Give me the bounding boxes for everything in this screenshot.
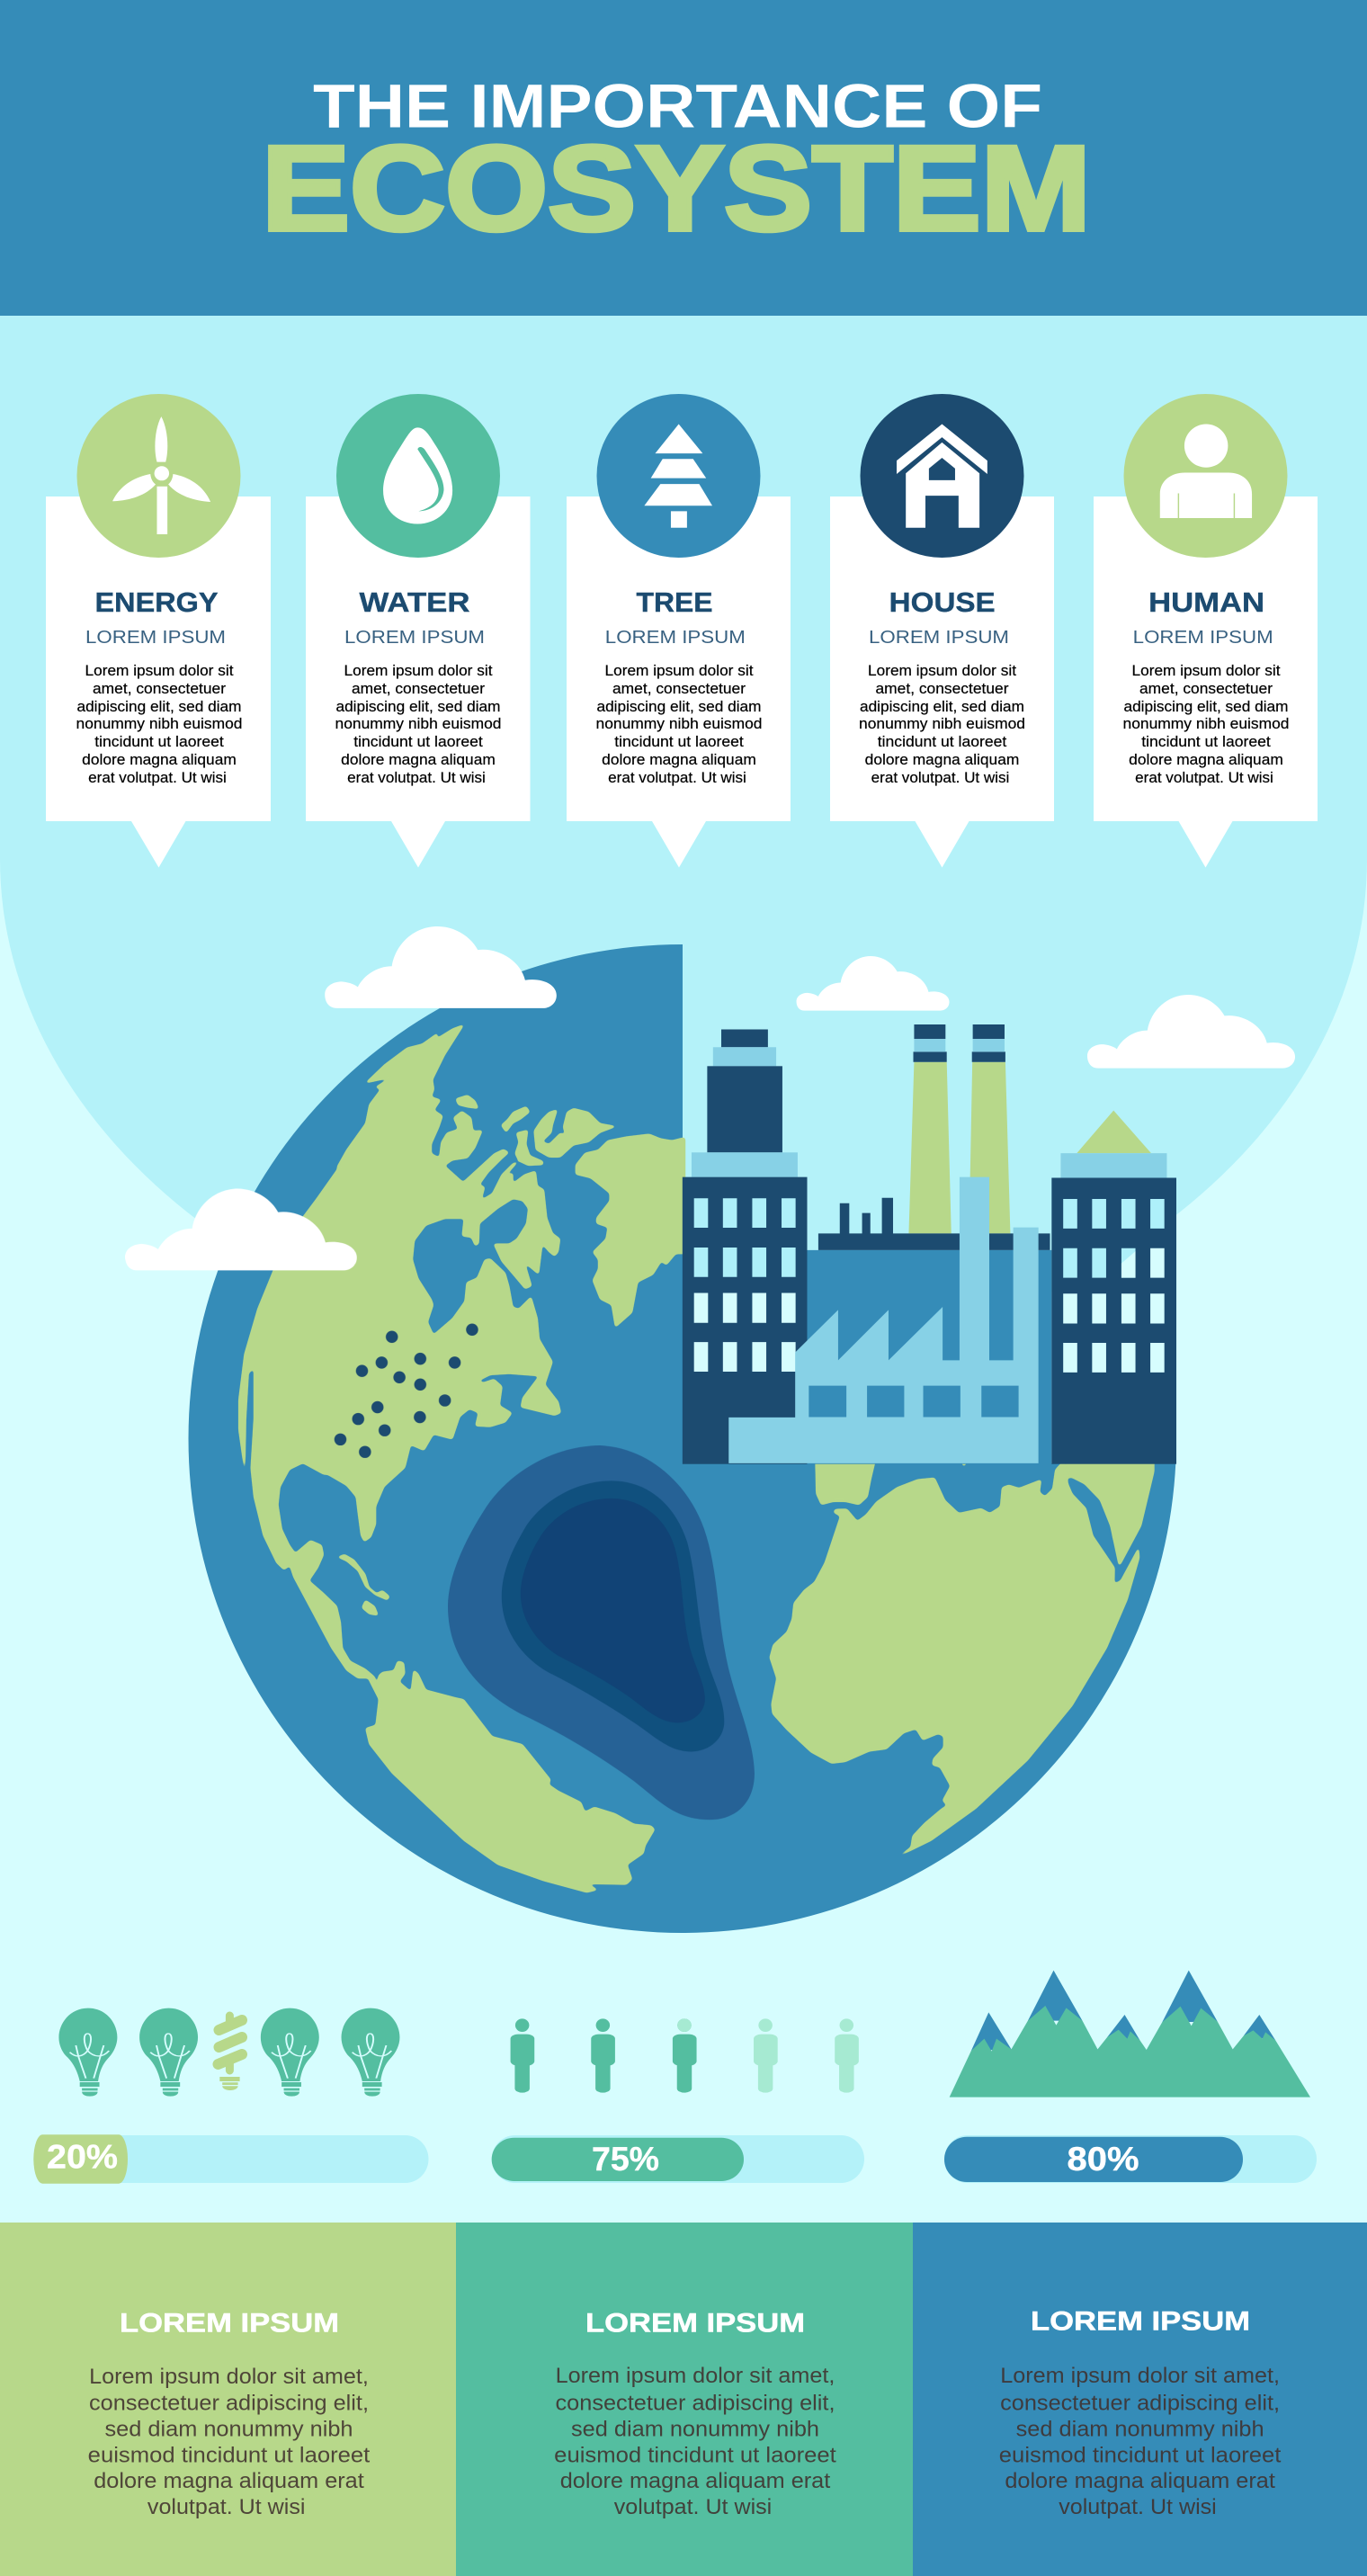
footer text: consectetuer adipiscing elit,: [1000, 2391, 1280, 2415]
footer text: dolore magna aliquam erat: [560, 2469, 831, 2493]
footer text: euismod tincidunt ut laoreet: [88, 2443, 371, 2467]
footer text: volutpat. Ut wisi: [614, 2495, 772, 2519]
progress bar 75%: 75%: [592, 2141, 659, 2178]
footer text: [554, 2364, 836, 2519]
body text: nonummy nibh euismod: [859, 715, 1025, 732]
globe disc: [189, 944, 1175, 1933]
footer text: euismod tincidunt ut laoreet: [999, 2443, 1282, 2467]
footer heading: LOREM IPSUM: [585, 2309, 805, 2339]
body text: tincidunt ut laoreet: [878, 733, 1007, 750]
footer text: sed diam nonummy nibh: [1016, 2417, 1264, 2441]
body text: amet, consectetuer: [612, 680, 746, 697]
globe illustration: [189, 944, 1175, 1933]
footer text: consectetuer adipiscing elit,: [556, 2391, 835, 2415]
body text: nonummy nibh euismod: [1122, 715, 1290, 732]
body text: dolore magna aliquam: [82, 751, 237, 768]
body text: adipiscing elit, sed diam: [77, 698, 241, 715]
roof bar and vents: [818, 1198, 1050, 1250]
body text: nonummy nibh euismod: [335, 715, 502, 732]
footer text: volutpat. Ut wisi: [1059, 2495, 1217, 2519]
body text: amet, consectetuer: [876, 680, 1009, 697]
footer heading: LOREM IPSUM: [1031, 2307, 1250, 2337]
right tower: [1051, 1111, 1176, 1464]
body text: tincidunt ut laoreet: [94, 733, 224, 750]
footer text: Lorem ipsum dolor sit amet,: [89, 2365, 369, 2389]
title: ECOSYSTEM: [262, 122, 1091, 255]
north america and arctic: [238, 1024, 685, 1685]
heading: water: WATER: [360, 586, 469, 618]
body text: erat volutpat. Ut wisi: [608, 769, 746, 786]
footer text: [999, 2364, 1282, 2519]
body text: amet, consectetuer: [1139, 680, 1273, 697]
panel: house: [830, 394, 1054, 867]
body text: Lorem ipsum dolor sit: [604, 662, 754, 679]
subheading: LOREM IPSUM: [605, 628, 746, 648]
footer text: volutpat. Ut wisi: [147, 2495, 305, 2519]
body text: [1122, 662, 1290, 786]
footer text: consectetuer adipiscing elit,: [89, 2391, 369, 2415]
heading: tree: TREE: [637, 586, 712, 618]
panel: energy: [46, 394, 271, 867]
body text: Lorem ipsum dolor sit: [85, 662, 234, 679]
subheading: LOREM IPSUM: [1133, 628, 1273, 648]
body text: nonummy nibh euismod: [76, 715, 243, 732]
icon: water drop: [336, 394, 500, 558]
body text: erat volutpat. Ut wisi: [871, 769, 1009, 786]
footer text: dolore magna aliquam erat: [1005, 2469, 1275, 2493]
people icons: [511, 2018, 859, 2093]
body text: amet, consectetuer: [93, 680, 226, 697]
icon: tree: [597, 394, 761, 558]
bulb icons: [58, 2008, 399, 2097]
footer text: sed diam nonummy nibh: [571, 2417, 819, 2441]
icon: wind turbine: [77, 394, 241, 558]
body text: [76, 662, 243, 786]
body text: Lorem ipsum dolor sit: [344, 662, 493, 679]
footer panel: green: [0, 2223, 456, 2576]
subheading: LOREM IPSUM: [85, 628, 226, 648]
footer text: euismod tincidunt ut laoreet: [554, 2443, 836, 2467]
left tower: [683, 1029, 807, 1464]
body text: tincidunt ut laoreet: [353, 733, 483, 750]
stat: mountains: [944, 1971, 1317, 2183]
body text: adipiscing elit, sed diam: [860, 698, 1024, 715]
heading: human: HUMAN: [1148, 586, 1264, 618]
body text: dolore magna aliquam: [602, 751, 756, 768]
heading: house: HOUSE: [889, 586, 996, 618]
body text: erat volutpat. Ut wisi: [88, 769, 227, 786]
body text: erat volutpat. Ut wisi: [347, 769, 486, 786]
cloud left: [125, 1189, 357, 1271]
body text: Lorem ipsum dolor sit: [1131, 662, 1281, 679]
cloud top centre: [325, 926, 557, 1008]
panel: tree: [567, 394, 791, 867]
chimneys: [908, 1024, 1010, 1233]
footer text: Lorem ipsum dolor sit amet,: [556, 2364, 835, 2388]
footer text: sed diam nonummy nibh: [104, 2417, 353, 2441]
progress bar 80%: 80%: [1067, 2141, 1139, 2178]
continents: [238, 1024, 1154, 1892]
footer heading: LOREM IPSUM: [120, 2309, 339, 2339]
body text: [335, 662, 502, 786]
cloud right: [1087, 995, 1295, 1069]
progress bar 20%: [33, 2134, 429, 2184]
cloud small: [797, 956, 950, 1011]
factory building: [728, 1177, 1039, 1463]
body text: [595, 662, 763, 786]
body text: tincidunt ut laoreet: [1141, 733, 1271, 750]
body text: Lorem ipsum dolor sit: [868, 662, 1016, 679]
subheading: LOREM IPSUM: [869, 628, 1009, 648]
body text: erat volutpat. Ut wisi: [1135, 769, 1273, 786]
population dots: [335, 1324, 478, 1458]
progress bar 80%: [944, 2135, 1317, 2183]
stat: lightbulbs: [33, 2008, 429, 2184]
body text: dolore magna aliquam: [341, 751, 496, 768]
title: [262, 72, 1091, 255]
footer text: dolore magna aliquam erat: [94, 2469, 364, 2493]
header band: [0, 0, 1367, 316]
panel: human: [1094, 394, 1318, 867]
stat: people: [492, 2018, 864, 2183]
body text: [859, 662, 1025, 786]
africa and arabia: [770, 1461, 1154, 1858]
panel: water: [306, 394, 531, 867]
body text: dolore magna aliquam: [1129, 751, 1283, 768]
mountains icon: [950, 1971, 1310, 2097]
energy-saving bulb icon: [218, 2016, 242, 2090]
factory back wall: [807, 1250, 1051, 1464]
south america and islands: [337, 1554, 655, 1892]
heading: energy: ENERGY: [95, 586, 219, 618]
progress bar 75%: [492, 2135, 864, 2183]
body text: dolore magna aliquam: [865, 751, 1019, 768]
icon: human: [1124, 394, 1288, 558]
light blue sky band with curved bottom: [0, 316, 1367, 1373]
progress bar 20%: 20%: [47, 2139, 118, 2176]
body text: amet, consectetuer: [352, 680, 485, 697]
oil spill blob: [448, 1445, 755, 1820]
body text: nonummy nibh euismod: [595, 715, 763, 732]
body text: adipiscing elit, sed diam: [336, 698, 500, 715]
body text: adipiscing elit, sed diam: [1124, 698, 1288, 715]
icon: house: [860, 394, 1023, 558]
subheading: LOREM IPSUM: [344, 628, 485, 648]
city and factory illustration: [683, 1024, 1176, 1464]
title: THE IMPORTANCE OF: [313, 72, 1042, 141]
footer panel: teal: [456, 2223, 913, 2576]
footer panel: blue: [913, 2223, 1367, 2576]
footer text: [88, 2365, 371, 2519]
footer text: Lorem ipsum dolor sit amet,: [1000, 2364, 1280, 2388]
body text: tincidunt ut laoreet: [614, 733, 744, 750]
body text: adipiscing elit, sed diam: [597, 698, 761, 715]
